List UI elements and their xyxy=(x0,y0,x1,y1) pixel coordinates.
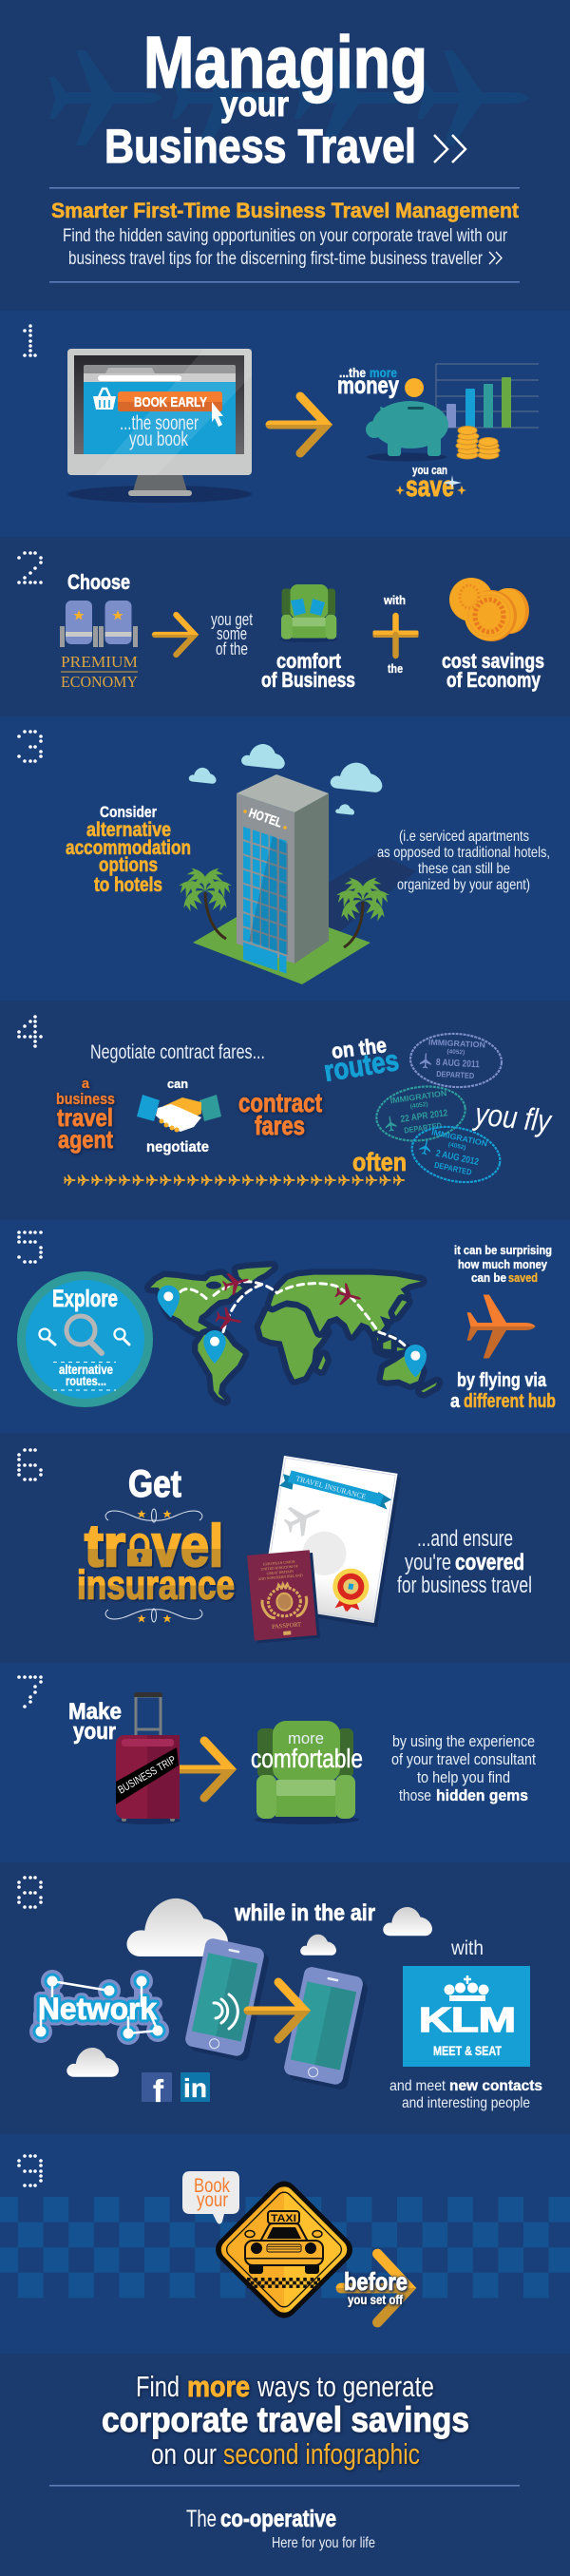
surprising text: how much money xyxy=(458,1257,548,1271)
premium economy logo: ECONOMY xyxy=(61,673,138,691)
plus sign xyxy=(374,593,417,676)
new contacts text xyxy=(390,2078,542,2111)
icon: red planes xyxy=(214,1269,364,1333)
icon: phone left xyxy=(183,1937,271,2062)
on the routes: routes xyxy=(322,1043,401,1088)
icon: coin stacks xyxy=(456,426,500,459)
plus sign: with xyxy=(383,593,406,607)
cost savings of economy xyxy=(442,649,544,692)
often: often xyxy=(352,1148,407,1176)
icon: taxi car: TAXI xyxy=(271,2213,296,2224)
passport stamp blue: IMMIGRATION xyxy=(430,1127,488,1149)
more comfortable xyxy=(251,1729,363,1773)
insurance document xyxy=(260,1456,401,1628)
section 5 number xyxy=(19,1232,41,1262)
passport: PASSPORT xyxy=(272,1621,301,1631)
arrow 9 with before text xyxy=(341,2254,409,2322)
subtitle block: business travel tips for the discerning first-time business traveller xyxy=(68,249,484,269)
travel insurance heading: vel xyxy=(152,1514,223,1579)
ensure covered text: ...and ensure xyxy=(417,1526,513,1552)
arrow 9 with before text: you set off xyxy=(348,2293,403,2307)
cost savings of economy: cost savings xyxy=(442,649,544,673)
new contacts text: and interesting people xyxy=(402,2095,530,2111)
you fly: you fly xyxy=(472,1096,555,1139)
consider text: Consider xyxy=(100,803,157,821)
title: your xyxy=(220,85,289,124)
icon: rosette xyxy=(329,1566,371,1614)
different hub text xyxy=(450,1370,556,1412)
passport stamp blue xyxy=(407,1119,505,1190)
new contacts text: new contacts xyxy=(449,2078,542,2094)
passport stamp teal: IMMIGRATION xyxy=(390,1088,447,1105)
more comfortable: comfortable xyxy=(251,1744,363,1773)
KLM logo: MEET & SEAT xyxy=(433,2044,503,2058)
icon: magnifier large xyxy=(66,1316,102,1353)
icon: pound coins xyxy=(449,578,529,641)
arrow 7 xyxy=(174,1741,231,1798)
consider text: options xyxy=(99,854,158,876)
windows xyxy=(243,827,287,974)
passport stamp teal: (4052) xyxy=(409,1101,428,1110)
icon: handshake: negotiate xyxy=(146,1139,209,1155)
icon: suitcase xyxy=(116,1692,180,1824)
consider text: to hotels xyxy=(94,874,162,896)
get text: Get xyxy=(128,1463,181,1505)
serviced apartments note: (i.e serviced apartments xyxy=(399,829,529,845)
passport stamp teal xyxy=(373,1081,468,1146)
contract fares: fares xyxy=(255,1111,305,1140)
section 2 number xyxy=(19,553,41,582)
passport: GREAT BRITAIN xyxy=(266,1570,294,1575)
plane row xyxy=(64,1174,407,1186)
travel insurance heading: insurance xyxy=(77,1562,235,1608)
speech bubble: your xyxy=(197,2189,228,2211)
icon: palm left xyxy=(177,865,234,939)
ensure covered text: covered xyxy=(455,1550,524,1575)
header planes watermark xyxy=(49,50,529,145)
icon: handshake xyxy=(137,1077,221,1155)
speech bubble xyxy=(182,2171,239,2223)
plus sign: the xyxy=(388,661,403,676)
hidden gems text: hidden gems xyxy=(436,1786,528,1804)
button: BOOK EARLY xyxy=(134,394,207,410)
network logo: Network xyxy=(38,1992,157,2026)
icon: magnifier small xyxy=(40,1328,129,1345)
arrow 2 xyxy=(155,615,195,655)
icon: white clouds xyxy=(66,1899,432,2077)
passport stamp purple: DEPARTED xyxy=(436,1069,474,1080)
icon: orange plane xyxy=(467,1294,536,1359)
icon: premium seats xyxy=(60,601,138,647)
passport: EUROPEAN UNION xyxy=(263,1560,295,1567)
money text xyxy=(337,365,399,399)
travel insurance heading: tr xyxy=(85,1514,125,1579)
monitor text: you book xyxy=(129,429,188,450)
speech bubble: Book xyxy=(194,2175,230,2197)
serviced apartments note: organized by your agent) xyxy=(397,877,530,893)
network logo: Network xyxy=(38,1992,157,2026)
arrow 9 with before text: before xyxy=(344,2267,408,2296)
serviced apartments note: these can still be xyxy=(418,861,510,877)
surprising text: it can be surprising xyxy=(454,1243,552,1257)
premium economy logo: PREMIUM xyxy=(61,653,138,671)
hidden gems text: to help you find xyxy=(417,1768,510,1786)
icon: cursor xyxy=(212,402,223,427)
bar chart xyxy=(436,364,539,428)
section 9 number xyxy=(19,2156,41,2185)
checker band xyxy=(0,2197,570,2298)
icon: linkedin: in xyxy=(183,2073,207,2103)
explore badge: routes... xyxy=(66,1373,106,1388)
icon: hotel building xyxy=(193,774,416,984)
while in the air: while in the air xyxy=(234,1900,375,1926)
explore badge: Explore xyxy=(52,1286,118,1312)
on the routes: on the xyxy=(331,1033,388,1063)
icon: armchair small xyxy=(279,584,338,642)
icon: suitcase: BUSINESS TRIP xyxy=(116,1754,179,1797)
footer call to action: on our xyxy=(151,2437,217,2471)
network logo: Network xyxy=(38,1992,157,2026)
taxi sign xyxy=(216,2182,352,2318)
footer rule and logo xyxy=(49,2485,520,2551)
icon: phone right xyxy=(282,1966,370,2090)
make your: your xyxy=(73,1719,116,1745)
explore badge xyxy=(17,1271,153,1407)
ribbon xyxy=(278,1469,393,1510)
business travel agent xyxy=(56,1076,115,1154)
make your xyxy=(68,1699,122,1745)
money text: more xyxy=(370,365,397,380)
ribbon: TRAVEL INSURANCE xyxy=(295,1474,367,1501)
passport stamp blue: 2 AUG 2012 xyxy=(435,1149,480,1168)
contract fares: contract xyxy=(238,1088,322,1117)
cost savings of economy: of Economy xyxy=(446,668,542,692)
icon: facebook xyxy=(142,2072,172,2109)
ensure covered text xyxy=(397,1526,532,1598)
icon: monitor with book early xyxy=(67,349,252,503)
icon: padlock xyxy=(127,1536,152,1566)
footer rule and logo: The xyxy=(186,2506,217,2532)
KLM logo: KLM xyxy=(419,2000,516,2039)
section 3 number xyxy=(19,732,41,761)
comfort of business: of Business xyxy=(261,668,355,692)
button xyxy=(118,391,222,411)
passport stamp purple: 8 AUG 2011 xyxy=(436,1058,480,1070)
footer call to action: ways to generate xyxy=(256,2370,434,2403)
passport stamp teal: 22 APR 2012 xyxy=(400,1108,448,1125)
flourish bottom xyxy=(105,1609,202,1623)
comfort of business xyxy=(261,649,355,692)
icon: map pins xyxy=(158,1286,427,1377)
money text: ...the xyxy=(339,365,366,380)
icon: armchair large xyxy=(255,1721,359,1824)
icon: crest xyxy=(260,1579,308,1619)
monitor text xyxy=(120,412,199,450)
passport stamp purple xyxy=(409,1032,503,1089)
icon: handshake: can xyxy=(167,1077,188,1091)
passport stamp blue: (4052) xyxy=(447,1141,466,1152)
monitor text: ...the sooner xyxy=(120,412,199,434)
explore badge: alternative xyxy=(59,1362,113,1377)
hidden gems text: by using the experience xyxy=(392,1732,535,1750)
surprising text: can be xyxy=(471,1270,506,1285)
KLM logo xyxy=(403,1966,530,2067)
make your: Make xyxy=(68,1699,122,1725)
icon: signal waves xyxy=(214,1994,238,2029)
arrow 8 xyxy=(248,1982,305,2039)
section 7 number xyxy=(19,1677,41,1707)
footer call to action: corporate travel savings xyxy=(102,2400,469,2439)
passport: AND NORTHERN IRELAND xyxy=(257,1574,303,1581)
consider text: alternative xyxy=(86,819,171,841)
save text xyxy=(395,464,466,503)
surprising text: saved xyxy=(508,1270,538,1285)
footer call to action: second infographic xyxy=(223,2437,420,2471)
passport stamp purple: (4052) xyxy=(446,1048,465,1056)
arrow 1 xyxy=(270,396,327,453)
icon: taxi car xyxy=(245,2211,323,2274)
icon: piggy bank xyxy=(366,378,448,462)
different hub text: by flying via xyxy=(457,1370,547,1391)
money text: money xyxy=(337,372,399,399)
passport xyxy=(247,1550,320,1644)
icon: facebook: f xyxy=(153,2073,164,2109)
subtitle block xyxy=(49,187,520,283)
consider text: accommodation xyxy=(66,837,191,859)
footer rule and logo: co-operative xyxy=(220,2506,336,2532)
title xyxy=(104,22,466,173)
business travel agent: a xyxy=(82,1076,90,1092)
section 4 number xyxy=(19,1017,41,1046)
title: Managing xyxy=(143,22,428,104)
footer call to action xyxy=(102,2370,469,2471)
business travel agent: agent xyxy=(58,1125,113,1154)
consider text xyxy=(66,803,191,896)
contract fares xyxy=(238,1088,322,1140)
passport stamp purple: IMMIGRATION xyxy=(428,1037,485,1050)
icon: hotel building: HOTEL xyxy=(247,806,284,830)
section 1 number xyxy=(25,326,35,355)
premium economy logo xyxy=(61,653,138,691)
section 8 number xyxy=(19,1878,41,1907)
more comfortable: more xyxy=(288,1729,324,1747)
passport: UNITED KINGDOM OF xyxy=(261,1564,298,1572)
choose text: Choose xyxy=(67,570,130,594)
business travel agent: travel xyxy=(57,1103,113,1132)
section 6 number xyxy=(19,1450,41,1479)
you get some of the xyxy=(211,610,253,658)
world map xyxy=(150,1267,437,1400)
surprising text xyxy=(454,1243,552,1285)
comfort of business: comfort xyxy=(276,649,342,673)
hidden gems text xyxy=(391,1732,536,1804)
you get some of the: of the xyxy=(216,639,248,658)
with: with xyxy=(450,1937,484,1959)
travel insurance heading xyxy=(77,1514,235,1608)
you get some of the: some xyxy=(217,624,247,643)
flourish top xyxy=(105,1509,202,1522)
hidden gems text: those xyxy=(399,1786,431,1804)
network logo xyxy=(29,1970,169,2045)
subtitle block: Smarter First-Time Business Travel Management xyxy=(51,199,519,222)
new contacts text: and meet xyxy=(390,2078,446,2094)
passport stamp blue: DEPARTED xyxy=(433,1160,472,1177)
icon: palm right xyxy=(334,874,391,947)
you get some of the: you get xyxy=(211,610,253,629)
business travel agent: business xyxy=(56,1090,115,1108)
title: Business Travel xyxy=(104,120,416,173)
passport stamp teal: DEPARTED xyxy=(404,1120,443,1135)
icon: clouds pale blue xyxy=(188,742,385,815)
footer rule and logo: Here for you for life xyxy=(272,2535,375,2551)
footer call to action: Find xyxy=(136,2370,180,2403)
save text: you can xyxy=(412,464,447,477)
save text: save xyxy=(406,469,454,503)
footer call to action: more xyxy=(187,2370,250,2403)
negotiate heading: Negotiate contract fares... xyxy=(90,1041,265,1063)
different hub text: a xyxy=(450,1391,461,1412)
hidden gems text: of your travel consultant xyxy=(391,1750,536,1768)
icon: basket xyxy=(93,389,116,410)
ensure covered text: you're xyxy=(405,1550,451,1575)
serviced apartments note xyxy=(377,829,550,893)
